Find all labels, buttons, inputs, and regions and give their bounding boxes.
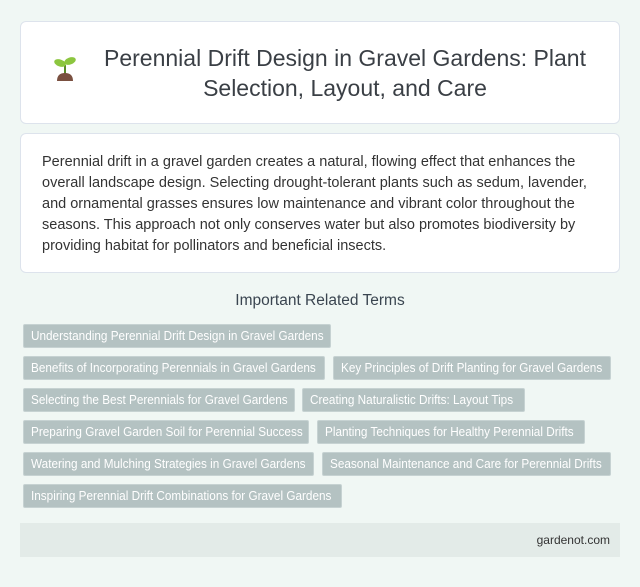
- intro card: [20, 133, 620, 273]
- intro text: Perennial drift in a gravel garden creates a natural, flowing effect that enhances the overall landscape design. Selecting drought-tolerant plants such as sedum, lavender, and ornamental grasses ensures low maintenance and vibrant color throughout the seasons. This approach not only conserves water but also promotes biodiversity by providing habitat for pollinators and beneficial insects.: [42, 154, 587, 254]
- footer: [20, 523, 620, 557]
- tags: Benefits of Incorporating Perennials in Gravel Gardens: [31, 361, 316, 375]
- tags: Planting Techniques for Healthy Perennial Drifts: [325, 425, 574, 439]
- tags: Seasonal Maintenance and Care for Perennial Drifts: [330, 457, 602, 471]
- tags: Understanding Perennial Drift Design in Gravel Gardens: [31, 329, 324, 343]
- title text: Perennial Drift Design in Gravel Gardens: Plant Selection, Layout, and Care: [104, 45, 586, 101]
- tags: Creating Naturalistic Drifts: Layout Tips: [310, 393, 513, 407]
- tags: Preparing Gravel Garden Soil for Perennial Success: [31, 425, 303, 439]
- title card: [20, 21, 620, 124]
- tags: Inspiring Perennial Drift Combinations for Gravel Gardens: [31, 489, 331, 503]
- tags: Key Principles of Drift Planting for Gravel Gardens: [341, 361, 602, 375]
- heading: related terms: Important Related Terms: [235, 292, 405, 309]
- footer credit: gardenot.com: [537, 533, 610, 547]
- tags: Selecting the Best Perennials for Gravel Gardens: [31, 393, 288, 407]
- icon: seedling: [54, 57, 76, 81]
- tags: Watering and Mulching Strategies in Gravel Gardens: [31, 457, 306, 471]
